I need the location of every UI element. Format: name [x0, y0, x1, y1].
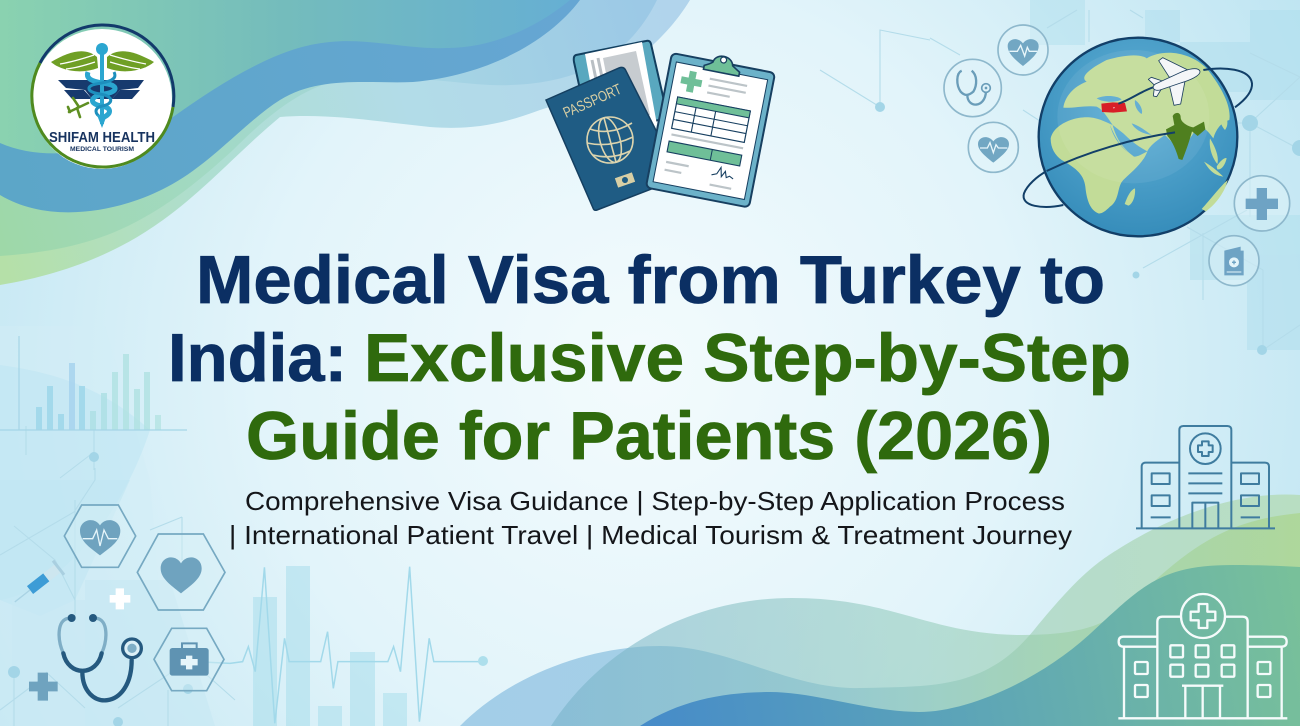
icon: medical kit hexagon [154, 628, 224, 691]
hospital icons [1118, 426, 1287, 718]
icon: passport [546, 67, 680, 210]
logo: caduceus emblem [51, 43, 154, 128]
text lines [663, 74, 755, 190]
globe: inland seas [1097, 96, 1152, 153]
logo: tagline: MEDICAL TOURISM [70, 147, 134, 153]
icon: heart monitor circle 2 [968, 122, 1018, 172]
title line 3: Guide for Patients (2026) [246, 398, 1052, 474]
icon: boarding document behind passport [574, 41, 668, 135]
icon: small hospital outline [1136, 426, 1275, 528]
icon: stethoscope circle [944, 59, 1001, 117]
icon: white plus [110, 588, 130, 609]
icon: heart hexagon [137, 534, 225, 610]
subtitle [229, 486, 1072, 550]
title [168, 242, 1131, 474]
bottom-right wave layers [460, 495, 1300, 726]
icon: blue plus [29, 673, 58, 701]
form table [672, 97, 750, 142]
subtitle line 1: Comprehensive Visa Guidance | Step-by-Step Application Process [245, 486, 1065, 516]
passport label: PASSPORT [561, 81, 624, 122]
green form bar [667, 141, 742, 166]
icon: syringe [9, 560, 65, 609]
clipboard clip [703, 53, 742, 76]
icon: passport circle [1209, 236, 1259, 286]
globe: continents [1051, 53, 1230, 213]
logo: Shifam Health [32, 25, 174, 169]
globe: Turkey flag [1101, 102, 1127, 113]
icon: heart monitor hexagon [64, 505, 136, 567]
globe [1024, 38, 1252, 236]
chart: faint bars and ECG line bottom [196, 566, 488, 726]
signature [711, 166, 735, 179]
icon: medical form clipboard [646, 47, 776, 208]
icon: airplane [1148, 58, 1200, 105]
title line 2 navy: India: [168, 320, 347, 396]
logo: name: SHIFAM HEALTH [49, 130, 155, 146]
passport chip [615, 172, 635, 188]
chart: faint bar chart left [0, 336, 187, 430]
globe: orbit right [1203, 69, 1252, 107]
globe: flight path [1047, 87, 1175, 171]
background: faint top-right panels and network [820, 0, 1300, 355]
icon: heart monitor circle 1 [998, 25, 1048, 75]
passport globe [587, 115, 633, 165]
top-left wave layers [0, 0, 690, 285]
green medical cross [679, 69, 704, 94]
title line 2 green: Exclusive Step-by-Step [364, 320, 1131, 396]
small circle icons and globe [944, 25, 1290, 286]
background: faint left panels [0, 326, 235, 726]
icon: large hospital outline white [1118, 594, 1287, 718]
icon: plus circle [1234, 176, 1290, 231]
globe: India [1166, 113, 1205, 160]
medical icons bottom-left [9, 505, 225, 701]
title line 1: Medical Visa from Turkey to [196, 242, 1105, 318]
subtitle line 2: | International Patient Travel | Medical Tourism & Treatment Journey [229, 520, 1072, 550]
icon: stethoscope [59, 614, 141, 700]
